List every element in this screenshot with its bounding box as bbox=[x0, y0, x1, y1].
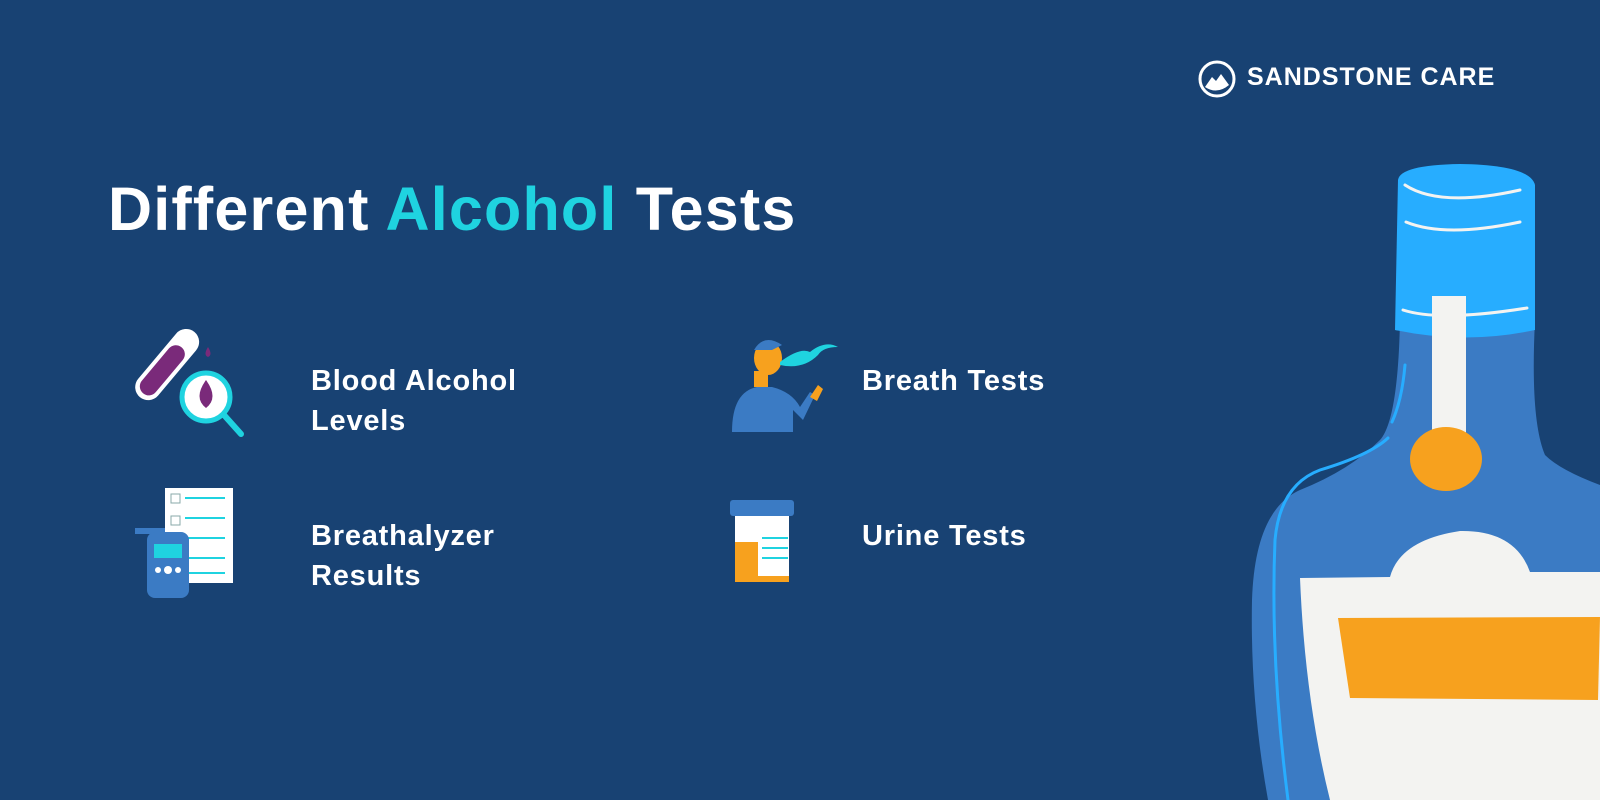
text: breath: Breath Tests bbox=[862, 365, 1045, 397]
text: breathalyzer: Results bbox=[311, 560, 421, 592]
logo bbox=[1198, 60, 1495, 98]
text: breathalyzer bbox=[311, 520, 495, 592]
title: Different Alcohol Tests bbox=[108, 175, 797, 243]
icon: breathalyzer bbox=[135, 488, 233, 598]
icon: test tube & magnifier bbox=[135, 329, 244, 437]
text: blood: Blood Alcohol bbox=[311, 365, 517, 397]
text: urine: Urine Tests bbox=[862, 520, 1027, 552]
logo: SANDSTONE CARE bbox=[1247, 63, 1495, 91]
text: breathalyzer: Breathalyzer bbox=[311, 520, 495, 552]
icon: urine cup bbox=[730, 500, 794, 582]
text: blood: Levels bbox=[311, 405, 406, 437]
icon: breath person bbox=[732, 340, 838, 432]
text: blood bbox=[311, 365, 517, 437]
